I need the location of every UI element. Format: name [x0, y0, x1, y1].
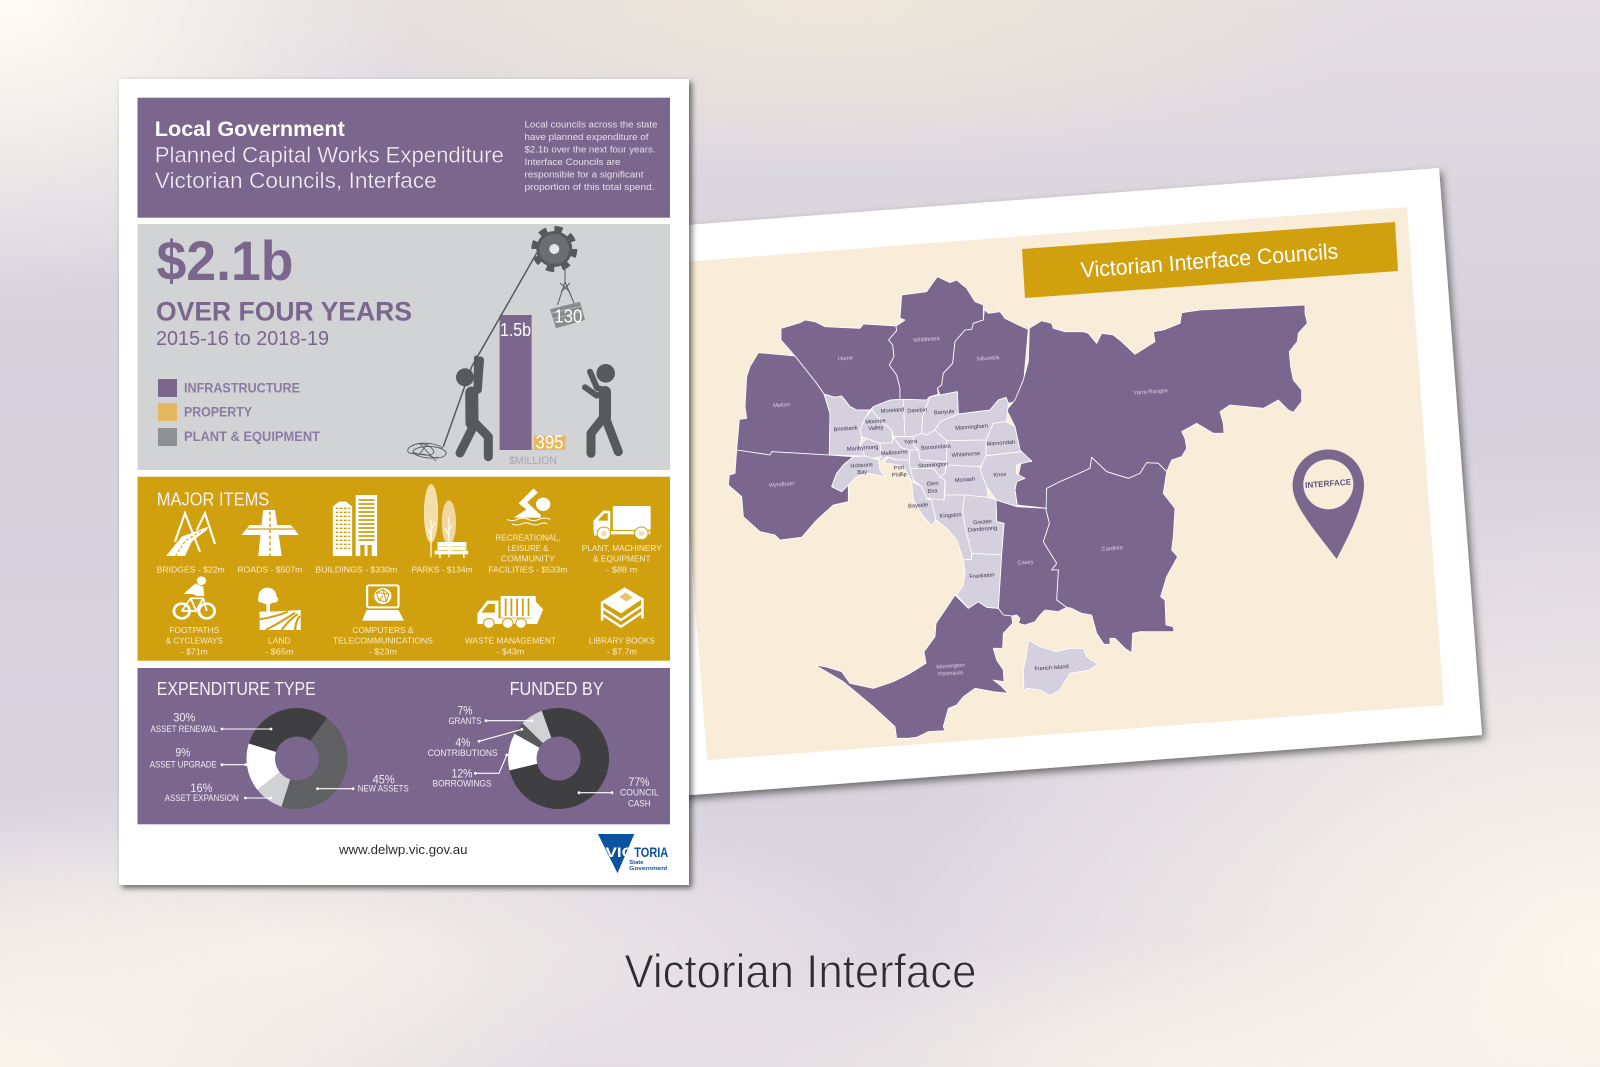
item labels: ROADS - $507m — [237, 564, 302, 574]
icon: bridge — [166, 513, 215, 556]
item labels: WASTE MANAGEMENT — [465, 636, 557, 646]
heading: funded by: FUNDED BY — [510, 679, 604, 699]
icon: cyclist — [174, 576, 215, 618]
council names: Mornington — [936, 663, 965, 671]
council names: Nillumbik — [977, 355, 1000, 363]
intro text: Local councils across the state — [524, 119, 658, 130]
item labels: COMMUNITY — [501, 554, 555, 564]
item labels: - $7.7m — [607, 646, 637, 656]
map cream background — [669, 207, 1444, 760]
council names: Boroondara — [921, 444, 952, 452]
metropolitan councils — [824, 392, 1098, 696]
heading: expenditure type: EXPENDITURE TYPE — [157, 679, 316, 699]
intro text: $2.1b over the next four years. — [524, 144, 656, 155]
callout: asset upgrade: ASSET UPGRADE — [150, 759, 217, 769]
callout: grants: 7% — [458, 703, 473, 717]
Banyule — [922, 392, 958, 435]
council names: Monash — [955, 477, 975, 484]
council names: Moreland — [881, 407, 905, 415]
Whitehorse — [947, 440, 986, 467]
council names: Banyule — [934, 409, 955, 416]
council names: Phillip — [892, 472, 907, 479]
callout: asset expansion: 16% — [190, 781, 213, 795]
Moreland — [872, 399, 905, 437]
Greater Dandenong — [963, 495, 1004, 555]
icon: hanging crate: 130 — [554, 306, 582, 326]
council names: Moonee — [865, 418, 886, 426]
item labels: - $23m — [369, 646, 397, 656]
headline figure: $2.1b — [156, 229, 294, 292]
donut chart: expenditure type — [247, 708, 348, 809]
item labels — [157, 532, 662, 656]
item labels: & EQUIPMENT — [593, 554, 651, 564]
council names — [769, 336, 1168, 678]
logo: Victoria State Government: Government — [629, 866, 667, 872]
council names: Melton — [773, 402, 790, 409]
item labels: - $43m — [496, 646, 524, 656]
icon: buildings — [333, 495, 377, 556]
panel: major items — [138, 477, 670, 661]
council names: Casey — [1017, 559, 1034, 567]
Melton — [737, 353, 830, 455]
Stonnington — [909, 450, 947, 477]
icon: rope — [408, 253, 537, 461]
council names: Valley — [868, 425, 884, 432]
council names: Dandenong — [968, 526, 997, 534]
callout: council cash — [578, 775, 659, 809]
intro text: Interface Councils are — [524, 157, 620, 168]
French Island — [1023, 640, 1098, 696]
icon: road — [241, 510, 299, 556]
panel: header — [138, 98, 670, 218]
item labels: - $71m — [181, 646, 208, 656]
Melbourne — [878, 437, 910, 462]
Casey — [996, 500, 1067, 625]
intro text: responsible for a significant — [524, 169, 644, 180]
council names: Port — [894, 465, 905, 472]
callout: asset expansion — [165, 781, 272, 803]
Whittlesea — [889, 277, 983, 400]
council names: Bay — [857, 469, 868, 476]
icon: interface location pin — [1293, 449, 1364, 559]
donut chart: funded by — [508, 708, 609, 809]
icon: gear — [534, 229, 574, 269]
subheading: Planned Capital Works Expenditure — [155, 142, 504, 168]
Boroondara — [913, 430, 947, 462]
callout: contributions: 4% — [455, 736, 471, 750]
poster sheet — [119, 79, 689, 885]
Monash — [940, 465, 988, 497]
item labels: BRIDGES - $22m — [157, 564, 225, 574]
legend — [158, 379, 321, 446]
callout: new assets: 45% — [373, 772, 395, 786]
item labels: PLANT, MACHINERY — [582, 543, 662, 553]
map card — [600, 168, 1482, 802]
logo: Victoria State Government — [598, 834, 668, 873]
callout: new assets: NEW ASSETS — [358, 784, 409, 794]
callout: borrowings: BORROWINGS — [432, 779, 492, 789]
council names: Kingston — [939, 512, 962, 520]
council names: Brimbank — [833, 425, 858, 433]
website url: www.delwp.vic.gov.au — [338, 842, 468, 857]
council names: Stonnington — [918, 462, 949, 470]
council names: Whitehorse — [951, 451, 980, 459]
council names: Melbourne — [881, 449, 908, 457]
bar: infrastructure: 1.5b — [500, 320, 531, 340]
logo: Victoria State Government: TORIA — [634, 844, 668, 860]
council names: Darebin — [907, 407, 927, 415]
callout: borrowings — [432, 754, 508, 789]
item labels: TELECOMMUNICATIONS — [333, 636, 433, 646]
callout: asset renewal: 30% — [173, 711, 196, 725]
subheading — [155, 142, 504, 193]
poster — [119, 79, 689, 885]
item labels: FACILITIES - $533m — [488, 564, 567, 574]
heading: major items: MAJOR ITEMS — [157, 490, 269, 510]
Maribyrnong — [860, 438, 882, 458]
Manningham — [935, 397, 1008, 441]
icon: interface location pin: INTERFACE — [1305, 477, 1352, 490]
icon: swimmer — [507, 488, 550, 525]
Moonee Valley — [860, 409, 893, 443]
council names: Knox — [993, 472, 1007, 479]
Mornington Peninsula — [815, 595, 1013, 738]
Knox — [980, 452, 1032, 507]
intro text: have planned expenditure of — [524, 132, 649, 143]
council map — [728, 277, 1364, 738]
callout: contributions — [428, 728, 523, 758]
council names: Wyndham — [769, 481, 795, 489]
council names: Greater — [973, 519, 992, 526]
item labels: - $88 m — [606, 564, 637, 574]
Port Phillip — [883, 457, 913, 484]
callout: new assets — [316, 772, 409, 794]
callout: grants — [448, 703, 533, 726]
council names: Peninsula — [938, 670, 964, 678]
item labels: FOOTPATHS — [169, 625, 220, 635]
council names: Cardinia — [1102, 545, 1124, 553]
item labels: - $65m — [265, 646, 294, 656]
icon: truck — [594, 506, 651, 540]
icon: land — [258, 588, 301, 630]
item icons — [166, 484, 651, 630]
subheading: Victorian Councils, Interface — [155, 168, 437, 193]
item labels: COMPUTERS & — [352, 625, 414, 635]
bar: infrastructure — [500, 315, 532, 450]
council names: Hobsons — [850, 462, 873, 470]
callout: asset upgrade: 9% — [175, 746, 191, 760]
callout: borrowings: 12% — [452, 766, 473, 780]
callout: asset renewal: ASSET RENEWAL — [150, 724, 218, 734]
council names: Maribyrnong — [847, 444, 878, 453]
logo: Victoria State Government: State — [629, 860, 644, 866]
council names: Hume — [838, 355, 853, 363]
callout: asset expansion: ASSET EXPANSION — [165, 793, 239, 803]
callout: grants: GRANTS — [448, 716, 482, 726]
council names: Maroondah — [986, 440, 1015, 448]
Nillumbik — [937, 309, 1028, 414]
bar: property: 395 — [536, 432, 564, 452]
item labels: PARKS - $134m — [412, 564, 472, 574]
council names: Yarra — [904, 439, 918, 446]
map title banner: Victorian Interface Councils — [1080, 238, 1339, 283]
heading: Local Government — [155, 118, 345, 141]
Glen Eira — [910, 468, 945, 500]
Hobsons Bay — [832, 456, 885, 492]
council names: Yarra Ranges — [1133, 388, 1168, 397]
icon: figure standing — [585, 364, 618, 453]
Cardinia — [1043, 457, 1178, 653]
icon: trees and bench — [424, 484, 467, 558]
item labels: LIBRARY BOOKS — [589, 636, 655, 646]
intro text — [524, 119, 658, 193]
Frankston — [957, 553, 1002, 608]
item labels: RECREATIONAL, — [495, 532, 560, 542]
legend: INFRASTRUCTURE — [184, 381, 300, 396]
council names: Bayside — [908, 502, 929, 510]
Maroondah — [986, 422, 1022, 456]
date range: 2015-16 to 2018-19 — [156, 328, 329, 350]
council names: Manningham — [955, 423, 988, 432]
panel: expenditure and funding — [138, 668, 670, 824]
item labels: LAND — [268, 636, 291, 646]
intro text: proportion of this total spend. — [524, 182, 654, 193]
icon: waste truck — [477, 596, 543, 628]
axis label: $MILLION — [509, 455, 557, 467]
Darebin — [903, 397, 930, 437]
panel: total spend — [138, 224, 670, 470]
council names: Glen — [926, 481, 939, 488]
callout: council cash: COUNCIL — [620, 788, 659, 798]
item labels: & CYCLEWAYS — [166, 636, 223, 646]
over four years: OVER FOUR YEARS — [156, 296, 412, 326]
legend: PLANT & EQUIPMENT — [184, 429, 321, 444]
callout: council cash: CASH — [628, 799, 651, 809]
page caption: Victorian Interface — [624, 945, 976, 998]
Brimbank — [824, 394, 870, 456]
callout: asset renewal — [150, 711, 272, 734]
icon: figure pulling rope — [456, 358, 488, 457]
callout: asset upgrade — [150, 746, 247, 769]
Kingston — [927, 495, 972, 560]
map title banner — [1022, 222, 1398, 298]
callout: council cash: 77% — [628, 775, 650, 789]
icon: books — [601, 587, 643, 627]
Hume — [781, 320, 900, 410]
logo: Victoria State Government: VIC — [606, 844, 634, 860]
item labels: BUILDINGS - $330m — [315, 564, 397, 574]
council names: Frankston — [969, 572, 995, 580]
icon: computer — [362, 585, 404, 621]
council names: Eira — [927, 488, 939, 495]
council names: Whittlesea — [913, 336, 941, 344]
Wyndham — [728, 450, 853, 540]
council names: French Island — [1034, 664, 1069, 673]
Yarra — [893, 437, 918, 450]
icon: hanging crate — [550, 268, 585, 328]
card sheet — [600, 168, 1482, 802]
legend: PROPERTY — [184, 405, 252, 420]
item labels: LEISURE & — [507, 543, 549, 553]
callout: contributions: CONTRIBUTIONS — [428, 748, 498, 758]
interface councils — [728, 277, 1307, 738]
Yarra Ranges — [1007, 305, 1307, 508]
Bayside — [912, 482, 936, 526]
